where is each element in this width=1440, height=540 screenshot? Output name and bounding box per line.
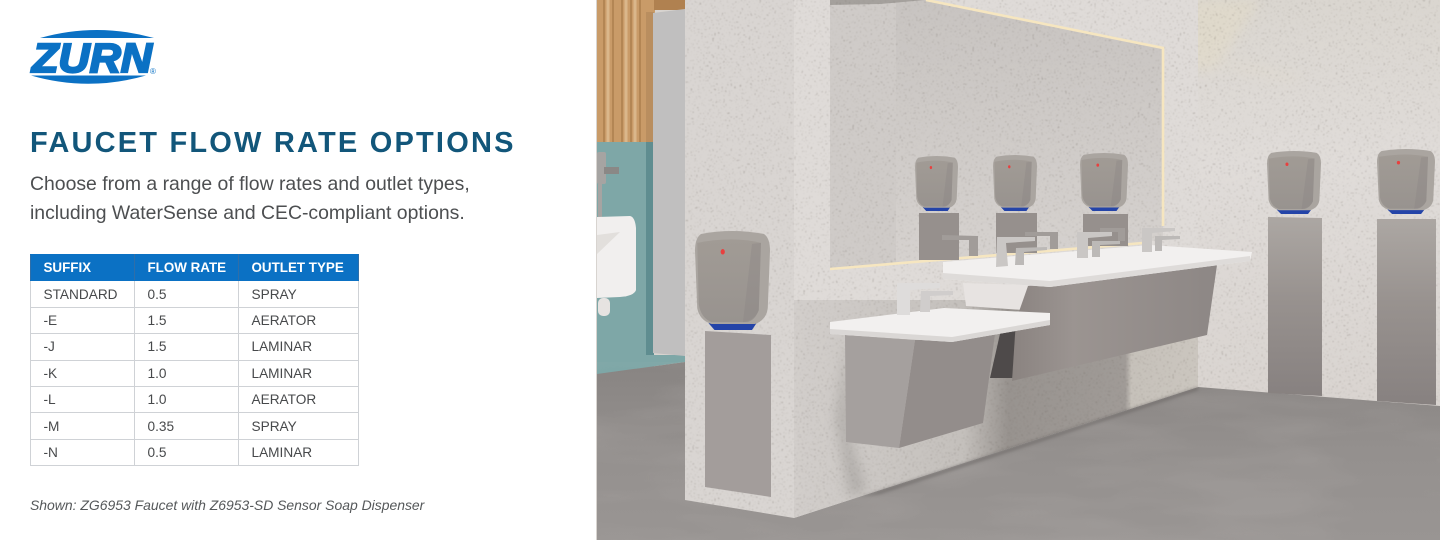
row: E xyxy=(44,313,316,328)
gap shadow under back sink xyxy=(990,325,1020,378)
front sink counter xyxy=(830,308,1050,342)
back sink body xyxy=(1012,265,1217,381)
row: N: -N xyxy=(44,445,58,460)
row: M xyxy=(44,419,297,434)
flush valve xyxy=(597,152,619,218)
row: standard: SPRAY xyxy=(252,287,297,302)
table header row: SUFFIX xyxy=(44,260,91,275)
row: L: AERATOR xyxy=(252,392,316,407)
row: J: LAMINAR xyxy=(252,339,312,354)
background wall base xyxy=(596,0,1440,540)
row: standard: STANDARD xyxy=(44,287,118,302)
pillar panel xyxy=(705,331,771,497)
row: K: -K xyxy=(44,366,57,381)
floor xyxy=(597,362,1440,540)
wall panels right xyxy=(1268,217,1436,405)
table header row: FLOW RATE xyxy=(148,260,226,275)
intro text xyxy=(30,173,470,224)
urinal xyxy=(597,216,636,316)
row: N: 0.5 xyxy=(148,445,166,460)
row: J xyxy=(44,339,312,354)
row: standard xyxy=(44,287,297,302)
row: L: -L xyxy=(44,392,56,407)
back sink faucets xyxy=(996,228,1180,267)
row: standard: 0.5 xyxy=(148,287,166,302)
row: N xyxy=(44,445,312,460)
table: flow rate options xyxy=(30,254,359,466)
row: L xyxy=(44,392,316,407)
intro text: Choose from a range of flow rates and outlet types, xyxy=(30,173,470,195)
reflected faucets xyxy=(942,228,1125,256)
front sink faucet and soap dispenser xyxy=(897,283,953,315)
row: M: -M xyxy=(44,419,59,434)
row: N: LAMINAR xyxy=(252,445,312,460)
wall dryers right xyxy=(1267,149,1435,214)
logo: Zurn: ZURN xyxy=(31,35,153,81)
teal wall xyxy=(597,142,685,374)
mirror-reflected panels xyxy=(919,213,1128,260)
row: J: 1.5 xyxy=(148,339,166,354)
illustration: restroom scene xyxy=(596,0,1440,540)
grey partition xyxy=(653,9,685,356)
table header row: OUTLET TYPE xyxy=(252,260,344,275)
back sink bowl xyxy=(963,283,1028,310)
caption: Shown: ZG6953 Faucet with Z6953-SD Sensor Soap Dispenser xyxy=(30,497,424,513)
mirror light strip xyxy=(830,0,1163,269)
floor mottling xyxy=(597,362,1440,540)
row: L: 1.0 xyxy=(148,392,166,407)
row: M: SPRAY xyxy=(252,419,297,434)
row: K xyxy=(44,366,312,381)
mirror xyxy=(830,0,1163,269)
back wall xyxy=(1160,0,1440,406)
pillar front face xyxy=(685,0,794,518)
row: J: -J xyxy=(44,339,55,354)
pillar dryer xyxy=(695,231,770,330)
row: K: 1.0 xyxy=(148,366,166,381)
row: M: 0.35 xyxy=(148,419,174,434)
row: E: 1.5 xyxy=(148,313,166,328)
back sink counter xyxy=(943,245,1252,287)
mirror-reflected dryers xyxy=(915,153,1128,211)
intro text: including WaterSense and CEC-compliant options. xyxy=(30,202,465,224)
table header row xyxy=(31,255,358,460)
title: FAUCET FLOW RATE OPTIONS xyxy=(30,127,516,159)
wall glow streak xyxy=(1165,0,1300,81)
row: K: LAMINAR xyxy=(252,366,312,381)
row: E: AERATOR xyxy=(252,313,316,328)
sink wall plane xyxy=(794,0,1198,518)
front sink body xyxy=(845,334,995,448)
front sink shadow on wall xyxy=(836,340,866,498)
wood slat wall xyxy=(597,0,685,142)
logo: Zurn: ® xyxy=(150,67,156,76)
lower wall with floor reflection xyxy=(794,300,1198,518)
stone speckle texture xyxy=(685,0,1440,518)
row: E: -E xyxy=(44,313,57,328)
wall-floor shadow xyxy=(860,387,1198,497)
